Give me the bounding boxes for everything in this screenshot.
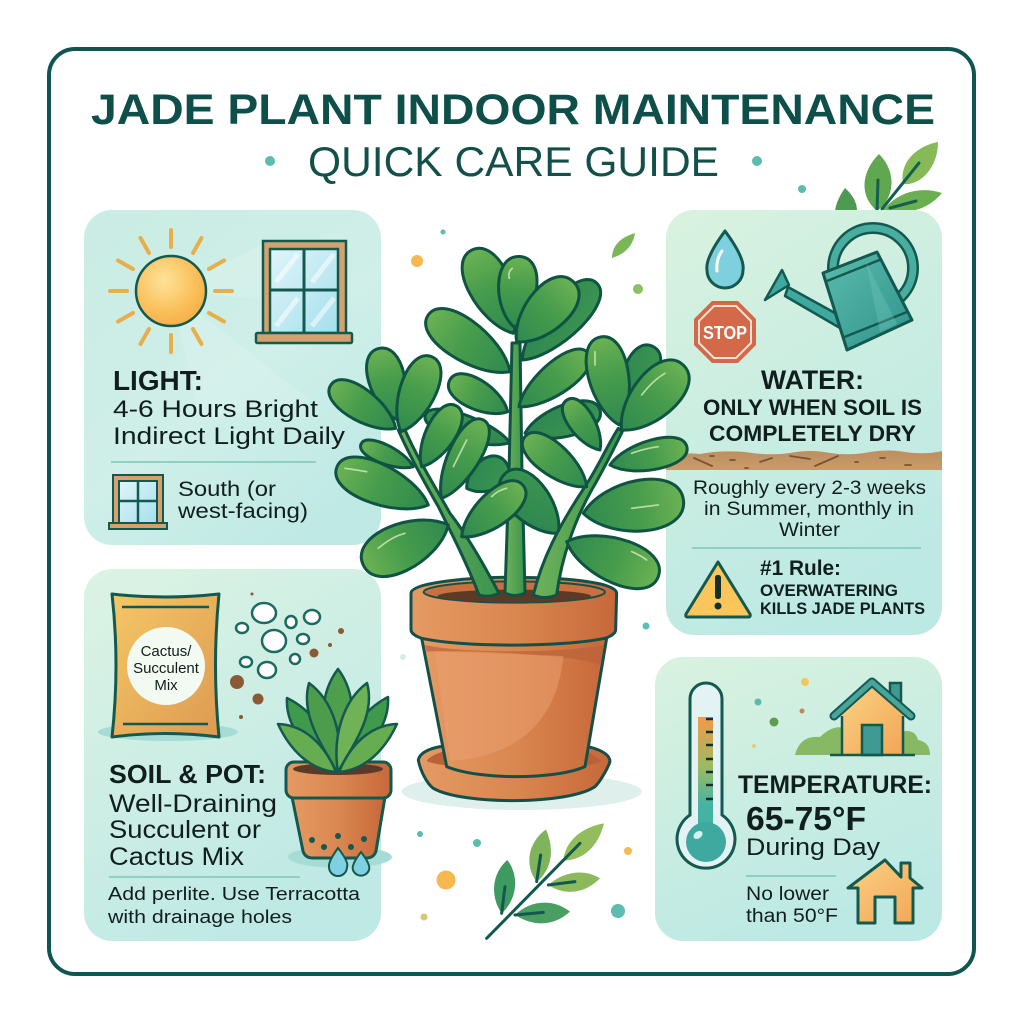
decorative dots around plant <box>400 230 650 920</box>
text: light hours: 4-6 Hours Bright <box>113 396 318 423</box>
icon: stop sign: STOP <box>703 323 747 343</box>
text: number one rule: #1 Rule: <box>760 557 841 580</box>
icon: back leaves <box>421 270 667 455</box>
text: water rule: ONLY WHEN SOIL IS <box>703 395 922 420</box>
icon: leaf highlights <box>345 268 665 560</box>
icon: sun <box>110 230 232 352</box>
text: soil mix: Succulent or <box>109 816 261 844</box>
text: during day: During Day <box>746 834 880 861</box>
text: temperature heading: TEMPERATURE: <box>738 771 932 799</box>
panel: soil and pot <box>84 569 397 941</box>
illustration: jade plant <box>322 241 699 810</box>
icon: warning mark <box>714 575 722 610</box>
text: light heading: LIGHT: <box>113 365 203 396</box>
text: minimum temperature: No lower <box>746 884 830 905</box>
text: soil note: with drainage holes <box>107 907 292 927</box>
icon: perlite and soil particles <box>230 592 344 719</box>
text: soil mix: Well-Draining <box>109 790 277 818</box>
text: water frequency <box>693 478 926 541</box>
title: JADE PLANT INDOOR MAINTENANCE <box>91 86 935 134</box>
text: water heading: WATER: <box>761 365 864 395</box>
text: number one rule: OVERWATERING <box>760 582 898 600</box>
panel: temperature <box>655 657 942 941</box>
icon: side stems <box>398 428 622 597</box>
text: direction <box>177 478 308 523</box>
icon: window <box>256 241 352 343</box>
text: water rule: COMPLETELY DRY <box>709 421 916 446</box>
icon: soil bag: Mix <box>154 677 178 694</box>
icon: bottom branch <box>487 823 604 938</box>
text: direction: west-facing) <box>177 500 308 523</box>
decorative title dots <box>265 156 806 193</box>
icon: front leaves <box>322 241 699 597</box>
icon: small succulent pot <box>278 669 397 876</box>
text: water frequency: Winter <box>779 520 841 541</box>
icon: dark middle leaves <box>458 450 573 547</box>
icon: small window <box>109 475 167 529</box>
text: soil heading: SOIL & POT: <box>109 759 266 789</box>
icon: centre stem <box>505 343 525 596</box>
text: soil note <box>107 884 361 927</box>
icon: stop sign <box>694 301 756 363</box>
panel: water <box>666 210 942 635</box>
icon: soil bag: Cactus/ <box>141 643 192 660</box>
icon: watering can <box>765 228 913 350</box>
light rays <box>171 240 310 420</box>
text: water frequency: Roughly every 2-3 weeks <box>693 478 926 499</box>
text: minimum temperature <box>746 884 838 927</box>
icon: terracotta pot <box>402 577 642 810</box>
icon: floating dots <box>752 678 809 748</box>
icon: top right leaves <box>835 142 942 212</box>
icon: thermometer <box>677 683 735 868</box>
text: light hours <box>113 396 345 450</box>
text: minimum temperature: than 50°F <box>746 906 838 927</box>
text: soil note: Add perlite. Use Terracotta <box>108 884 361 904</box>
subtitle: QUICK CARE GUIDE <box>308 138 719 185</box>
text: direction: South (or <box>178 478 276 501</box>
icon: small house <box>848 860 922 923</box>
icon: soil bag <box>98 594 238 741</box>
text: water frequency: in Summer, monthly in <box>704 499 914 520</box>
icon: house with bushes <box>795 682 930 755</box>
text: number one rule: KILLS JADE PLANTS <box>760 600 925 618</box>
soil strip <box>666 450 942 470</box>
text: soil mix: Cactus Mix <box>109 843 245 871</box>
text: number one rule <box>760 557 925 618</box>
text: light hours: Indirect Light Daily <box>113 423 345 450</box>
text: soil mix <box>109 790 277 871</box>
panel: light <box>84 210 381 545</box>
text: temperature range: 65-75°F <box>746 800 866 837</box>
icon: soil bag: Succulent <box>133 660 200 677</box>
icon: warning triangle <box>686 562 750 617</box>
text: water rule <box>703 395 922 446</box>
icon: water drop <box>707 231 743 288</box>
